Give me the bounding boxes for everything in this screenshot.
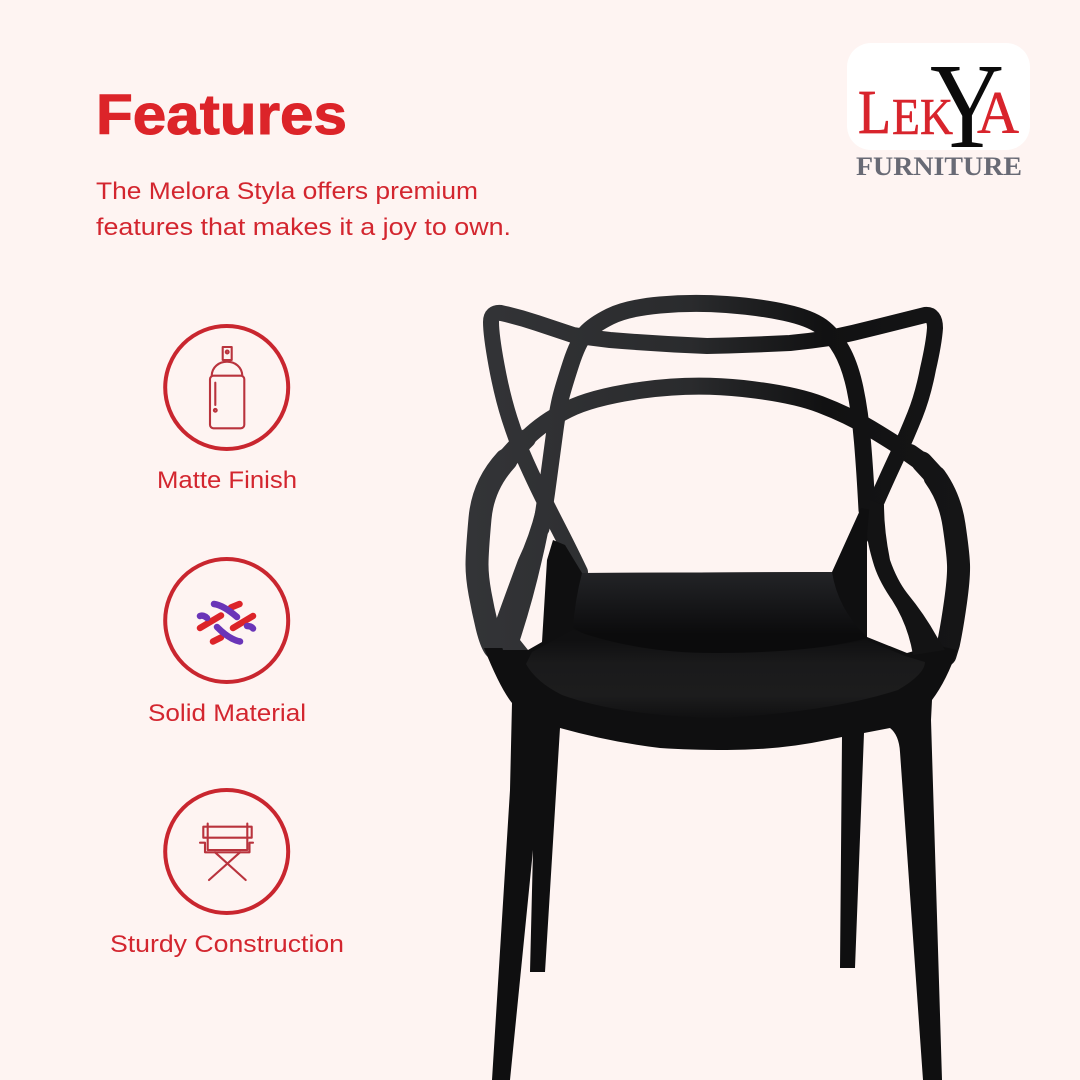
logo subtitle: FURNITURE bbox=[856, 152, 1022, 181]
chair seat surface bbox=[526, 630, 925, 718]
feature: solid material bbox=[148, 559, 306, 727]
icon: spray can bbox=[165, 326, 288, 449]
chair backrest shading bbox=[573, 572, 868, 655]
intro text: features that makes it a joy to own. bbox=[96, 214, 511, 241]
intro text bbox=[96, 178, 511, 241]
feature: matte finish bbox=[157, 326, 297, 494]
title: Features bbox=[96, 83, 347, 147]
feature: sturdy construction bbox=[110, 790, 344, 958]
chair bbox=[477, 303, 959, 1080]
logo wordmark: L bbox=[858, 79, 891, 147]
logo badge bbox=[847, 43, 1030, 150]
logo bbox=[847, 39, 1030, 181]
chair body, seat and legs bbox=[484, 508, 957, 1080]
label: Sturdy Construction bbox=[110, 931, 344, 958]
logo wordmark: EK bbox=[892, 89, 953, 146]
logo wordmark bbox=[858, 39, 1019, 174]
chair back tubes bbox=[477, 303, 959, 655]
label: Solid Material bbox=[148, 700, 306, 727]
left arm strut bbox=[495, 505, 553, 650]
label: Matte Finish bbox=[157, 467, 297, 494]
intro text: The Melora Styla offers premium bbox=[96, 178, 478, 205]
icon: woven strands bbox=[165, 559, 288, 682]
logo wordmark: A bbox=[977, 80, 1019, 146]
logo wordmark: Y bbox=[930, 39, 1004, 174]
icon: director's chair bbox=[165, 790, 288, 913]
right arm strut bbox=[867, 500, 945, 655]
